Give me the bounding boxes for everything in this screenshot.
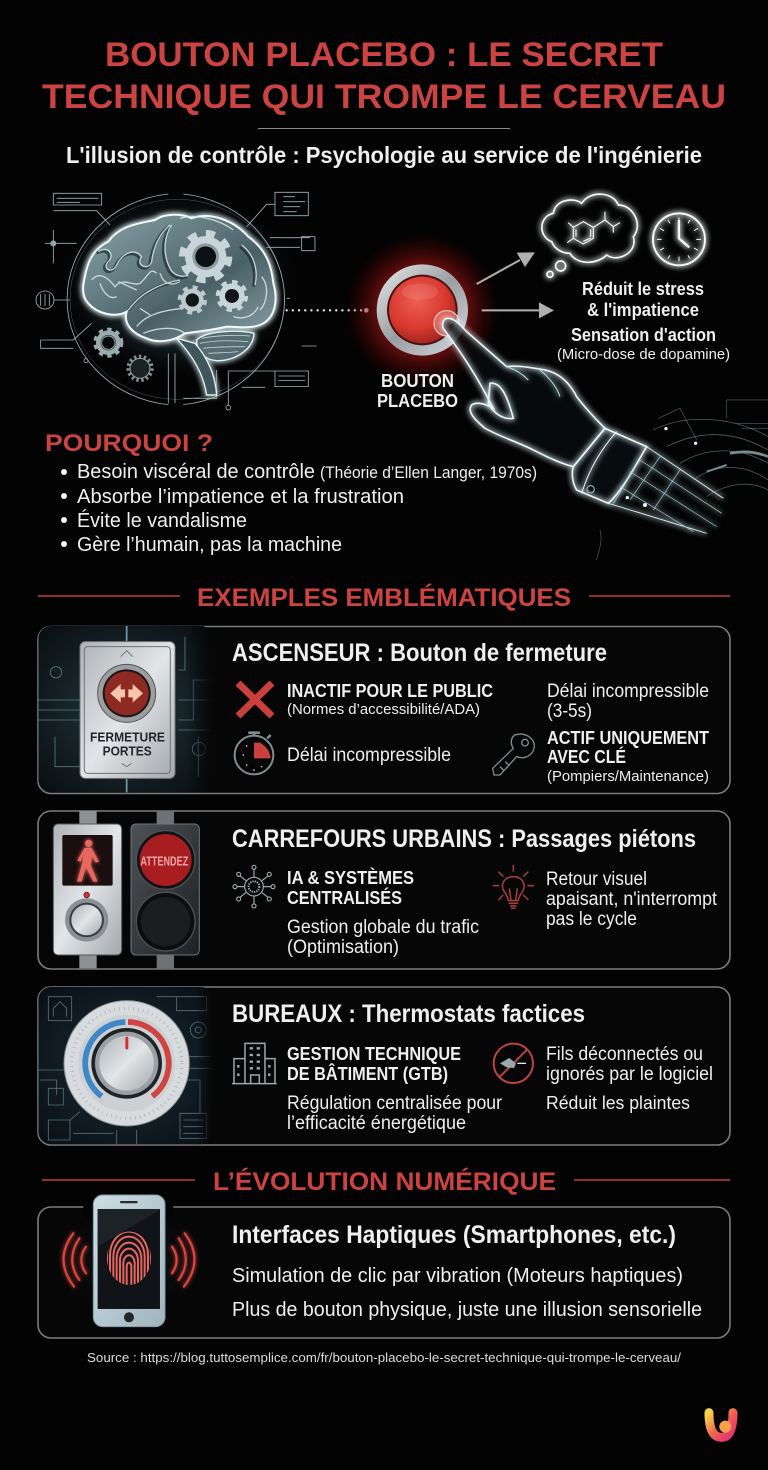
text: centralised systems: (Optimisation): [287, 937, 399, 958]
heading: CARREFOURS URBAINS : Passages piétons: [232, 825, 696, 853]
illustration: elevator button: PORTES: [103, 744, 152, 759]
panel: ascenseur: [38, 626, 730, 794]
text: GTB: l’efficacité énergétique: [287, 1113, 466, 1134]
text: centralised systems: IA & SYSTÈMES: [287, 867, 414, 888]
text: centralised systems: Gestion globale du trafic: [287, 917, 479, 938]
text: feedback: pas le cycle: [546, 909, 637, 930]
list: reasons: Absorbe l’impatience et la frustration: [77, 486, 404, 508]
icon: stopwatch: [235, 733, 273, 774]
text: wires: ignorés par le logiciel: [546, 1064, 713, 1085]
effects text: Réduit le stress: [582, 279, 704, 299]
heading: BUREAUX : Thermostats factices: [232, 1000, 585, 1028]
text: key: [547, 728, 709, 785]
logo: [709, 1413, 733, 1437]
list: reasons: [61, 461, 537, 556]
icon: disconnected wire: [494, 1044, 533, 1083]
text: GTB: Régulation centralisée pour: [287, 1093, 503, 1114]
text: wires: [546, 1044, 713, 1113]
text: delay right: (3-5s): [547, 701, 592, 722]
list: reasons: Gère l’humain, pas la machine: [77, 534, 342, 556]
effects text: Sensation d'action: [571, 325, 716, 345]
icon: glowing hand: [443, 318, 723, 533]
text: delay right: Délai incompressible: [547, 681, 709, 702]
illustration: thermostat dial: [38, 987, 213, 1144]
illustration: elevator button: FERMETURE: [90, 730, 165, 745]
text: inactive: INACTIF POUR LE PUBLIC: [287, 681, 493, 701]
text: key: (Pompiers/Maintenance): [547, 768, 709, 785]
dotted connector: [287, 308, 369, 313]
list: reasons: Besoin viscéral de contrôle: [77, 461, 315, 483]
icon: red button: [377, 264, 468, 356]
icon: clock: [653, 213, 705, 265]
illustration: elevator button: [38, 626, 213, 793]
text: GTB: DE BÂTIMENT (GTB): [287, 1063, 448, 1084]
icon: network: [233, 865, 275, 908]
text: delay right: [547, 681, 709, 722]
text: key: ACTIF UNIQUEMENT: [547, 728, 709, 748]
text: GTB: [287, 1044, 503, 1134]
subtitle: L'illusion de contrôle : Psychologie au service de l'ingénierie: [66, 142, 702, 168]
text: wires: Réduit les plaintes: [546, 1093, 690, 1113]
brain outline: [83, 215, 276, 395]
label: bouton placebo: BOUTON: [381, 371, 454, 391]
label: bouton placebo: PLACEBO: [377, 391, 458, 411]
text: feedback: [546, 869, 718, 930]
icon: building: [232, 1043, 277, 1084]
title: TECHNIQUE QUI TROMPE LE CERVEAU: [42, 78, 726, 116]
label: bouton placebo: [377, 371, 458, 411]
panel: bureaux: [38, 987, 730, 1145]
effects text: & l'impatience: [587, 300, 699, 320]
text: centralised systems: CENTRALISÉS: [287, 887, 402, 908]
text: haptics: Plus de bouton physique, juste une illusion sensorielle: [232, 1299, 702, 1321]
text: delay: Délai incompressible: [287, 745, 451, 766]
text: feedback: Retour visuel: [546, 869, 647, 890]
arrows: [477, 252, 554, 318]
text: centralised systems: [287, 867, 479, 958]
heading: pourquoi: POURQUOI ?: [45, 430, 213, 457]
heading: ASCENSEUR : Bouton de fermeture: [232, 639, 607, 667]
text: feedback: apaisant, n'interrompt: [546, 889, 718, 910]
section heading: evolution: L’ÉVOLUTION NUMÉRIQUE: [213, 1167, 556, 1196]
title: [42, 36, 726, 116]
panel: evolution: [38, 1192, 730, 1338]
list: reasons: Évite le vandalisme: [77, 509, 247, 532]
effects text: (Micro-dose de dopamine): [557, 346, 730, 363]
illustration: pedestrian signal: [53, 811, 199, 968]
button and hand: [346, 194, 768, 560]
source: Source : https://blog.tuttosemplice.com/fr/bouton-placebo-le-secret-technique-qui-trompe-le-cerveau/: [87, 1350, 681, 1365]
list: reasons: (Théorie d’Ellen Langer, 1970s): [320, 463, 537, 482]
text: haptics: [232, 1265, 702, 1321]
title: BOUTON PLACEBO : LE SECRET: [105, 36, 663, 74]
illustration: brain with gears: [36, 190, 369, 410]
text: GTB: GESTION TECHNIQUE: [287, 1044, 461, 1064]
panel: carrefours: [38, 811, 730, 969]
section heading: exemples: EXEMPLES EMBLÉMATIQUES: [197, 583, 571, 612]
gears: [95, 234, 246, 380]
text: inactive: [287, 681, 493, 718]
text: wires: Fils déconnectés ou: [546, 1044, 703, 1065]
text: haptics: Simulation de clic par vibration (Moteurs haptiques): [232, 1265, 683, 1287]
text: key: AVEC CLÉ: [547, 746, 626, 767]
icon: key: [493, 734, 534, 775]
illustration: phone with fingerprint: [59, 1194, 199, 1328]
icon: red cross: [238, 683, 272, 716]
heading: Interfaces Haptiques (Smartphones, etc.): [232, 1221, 676, 1249]
illustration: pedestrian signal: ATTENDEZ: [140, 854, 188, 869]
icon: thought cloud with molecule: [542, 194, 637, 277]
icon: light bulb: [493, 865, 534, 908]
text: inactive: (Normes d’accessibilité/ADA): [287, 701, 480, 718]
effects text: [557, 279, 730, 363]
